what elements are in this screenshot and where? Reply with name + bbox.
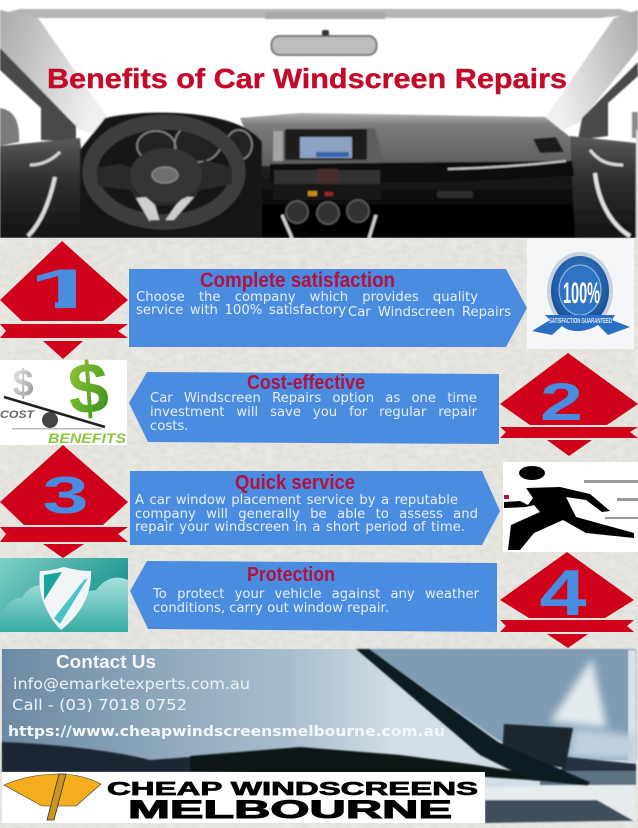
- dark wiper arm: [356, 649, 590, 786]
- left door handle and trim: [30, 152, 60, 165]
- panel 4: protection: Protection: [247, 564, 335, 586]
- pale reflection: [550, 658, 607, 728]
- header photo: car interior: [0, 8, 638, 238]
- climate knobs: [286, 200, 369, 224]
- panel 1 body text: service with 100% satisfactory: [136, 303, 346, 318]
- dark wiper blade centre: [190, 747, 590, 784]
- panel 2 body text: Car Windscreen Repairs option as one time: [150, 391, 477, 406]
- cowl behind wheel: [80, 113, 262, 238]
- panel 2 body text: [150, 391, 478, 434]
- panel 3 body text: A car window placement service by a reputable: [135, 493, 458, 508]
- image: running figure: [503, 462, 638, 552]
- panel 1: complete satisfaction: Complete satisfaction: [200, 269, 395, 292]
- left pillar: [0, 10, 108, 136]
- panel 3: quick service: Quick service: [235, 471, 355, 494]
- panel 3 body text: repair your windscreen in a short period of time.: [135, 520, 465, 535]
- number badge 4: 4: [540, 556, 587, 629]
- panel 3: quick service: [130, 471, 500, 545]
- title: Benefits of Car Windscreen Repairs: [47, 63, 567, 94]
- number badge 3: 3: [42, 466, 89, 524]
- console trim: [282, 215, 376, 238]
- left seat: [0, 108, 19, 146]
- logo banner: MELBOURNE: [128, 796, 452, 824]
- image: cost vs benefits: BENEFITS: [48, 430, 127, 446]
- hood vent: [485, 800, 634, 823]
- gloss trim line: [270, 161, 574, 183]
- image: cost vs benefits: [0, 348, 127, 446]
- logo banner: [2, 772, 485, 824]
- textured background: [0, 238, 638, 828]
- right door frame: [578, 62, 638, 140]
- panel 2 body text: investment will save you for regular repair: [150, 405, 477, 420]
- glove box handle: [437, 191, 473, 198]
- number badge 2: [500, 353, 638, 456]
- rear view mirror: [272, 30, 376, 55]
- panel 3 body text: [135, 493, 478, 535]
- panel 1: complete satisfaction: [129, 269, 527, 347]
- left door frame: [0, 48, 76, 142]
- image: cost vs benefits: COST: [0, 409, 35, 421]
- pale dash reflection: [568, 728, 636, 760]
- footer photo: windscreen and wiper: [2, 649, 636, 823]
- panel 4 body text: conditions, carry out window repair.: [153, 601, 389, 616]
- contact phone: Call - (03) 7018 0752: [12, 696, 187, 714]
- number badge 1: [0, 241, 128, 359]
- instrument cluster: [137, 124, 252, 162]
- dark band left: [2, 742, 190, 772]
- number badge 4: [500, 552, 634, 648]
- lower dashboard: [60, 160, 638, 238]
- panel 1 body text: [136, 290, 511, 320]
- panel 4 body text: [152, 587, 480, 616]
- left door panel: [0, 138, 90, 238]
- number badge 3: [0, 445, 128, 558]
- icon: yellow windscreen with wiper: [4, 774, 101, 820]
- roof lining: [0, 9, 638, 18]
- contact email: info@emarketexperts.com.au: [13, 675, 250, 693]
- air vent: [533, 137, 564, 153]
- right door handle and trim: [590, 150, 623, 165]
- right seat: [632, 112, 638, 138]
- hood: [485, 785, 636, 823]
- image: satisfaction guaranteed seal: [527, 239, 634, 349]
- logo banner: CHEAP WINDSCREENS: [107, 779, 478, 799]
- panel 4: protection: [130, 561, 497, 632]
- number badge 1: 1: [28, 258, 100, 320]
- blue glass right of wiper: [368, 649, 636, 760]
- panel 2: cost-effective: [129, 372, 499, 444]
- image: cost vs benefits: $: [66, 348, 111, 430]
- steering wheel: [90, 122, 238, 225]
- panel 1 body text: Choose the company which provides quality: [136, 290, 478, 305]
- number badge 2: 2: [540, 372, 583, 431]
- right pillar: [545, 10, 638, 136]
- panel 2 body text: costs.: [150, 419, 188, 434]
- panel 2: cost-effective: Cost-effective: [247, 372, 365, 394]
- climate panel: [274, 170, 380, 184]
- contact website: https://www.cheapwindscreensmelbourne.com.au: [8, 724, 445, 740]
- centre stack: [272, 128, 384, 164]
- panel 3 body text: company will generally be able to assess and: [135, 507, 478, 522]
- upper dashboard: [240, 113, 572, 166]
- mirror block: [502, 724, 573, 768]
- image: protection shield: [0, 558, 128, 632]
- image: satisfaction guaranteed seal: 100%: [563, 277, 600, 310]
- infotainment screen: [300, 137, 352, 158]
- right door panel: [570, 136, 636, 238]
- contact heading: Contact Us: [56, 652, 156, 672]
- panel 1 body text: Car Windscreen Repairs: [348, 305, 511, 320]
- panel 4 body text: To protect your vehicle against any weather: [153, 587, 479, 602]
- image: cost vs benefits: $: [12, 363, 34, 405]
- dark band right: [560, 757, 636, 772]
